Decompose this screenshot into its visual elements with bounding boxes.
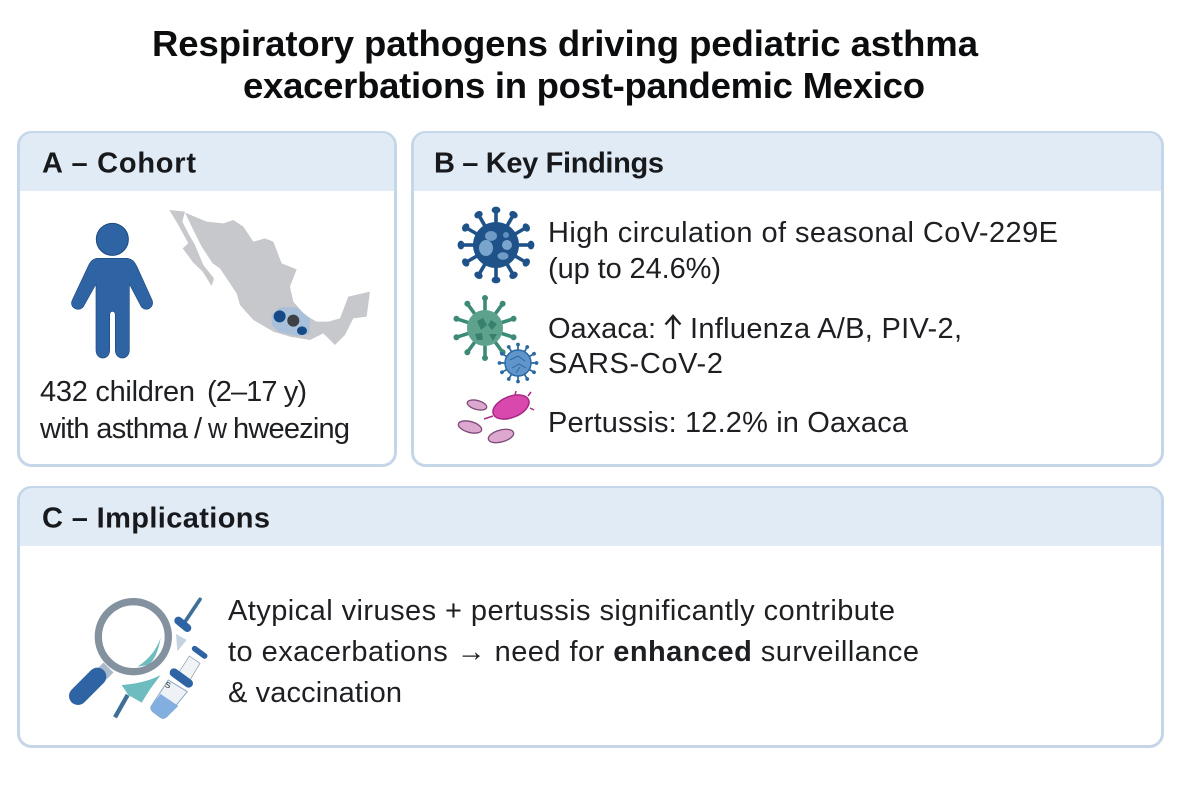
text: implications statement: Atypical viruses + pertussis significantly contribute	[228, 595, 895, 627]
title	[152, 23, 979, 106]
text: cohort description: with asthma	[39, 413, 189, 445]
text: Oaxaca finding: SARS-CoV-2	[548, 348, 723, 380]
icon: magnifying glass, swab and vial: S	[164, 680, 172, 690]
text: implications statement: to exacerbations → need for enhanced surveillance	[228, 636, 919, 668]
map: Mexico with highlighted southern states	[169, 210, 370, 345]
text: implications statement: & vaccination	[228, 677, 402, 709]
title: Respiratory pathogens driving pediatric asthma	[152, 23, 979, 64]
heading: A – Cohort: A – Cohort	[42, 148, 196, 180]
panel: C – Implications	[18, 488, 1162, 746]
icon: child figure	[72, 223, 153, 358]
text: cohort description: w	[207, 413, 228, 445]
text: CoV-229E finding	[548, 217, 1058, 285]
text: cohort description: /	[194, 413, 203, 445]
text: cohort description: 432 children	[40, 376, 195, 408]
icon: pertussis bacteria	[457, 390, 534, 445]
icon: coronavirus	[458, 207, 534, 283]
text: CoV-229E finding: High circulation of seasonal CoV-229E	[548, 217, 1058, 249]
icon: magnifying glass, swab and vial	[78, 599, 205, 719]
text: cohort description: (2–17 y)	[207, 376, 307, 408]
text: implications statement	[228, 595, 919, 709]
text: Oaxaca finding: Influenza A/B, PIV-2,	[690, 313, 962, 345]
icon: green and blue viruses	[453, 295, 538, 383]
heading: B – Key Findings: B – Key Findings	[434, 148, 664, 180]
text: CoV-229E finding: (up to 24.6%)	[548, 253, 721, 285]
text: pertussis finding: Pertussis: 12.2% in Oaxaca	[548, 407, 909, 439]
arrow: up	[666, 316, 680, 339]
text: Oaxaca finding	[548, 313, 962, 380]
text: cohort description: hweezing	[233, 413, 350, 445]
text: cohort description	[39, 376, 350, 445]
title: exacerbations in post-pandemic Mexico	[243, 65, 925, 106]
text: Oaxaca finding: Oaxaca:	[548, 313, 656, 345]
panel: B – Key Findings	[412, 132, 1162, 466]
heading: C – Implications: C – Implications	[42, 502, 270, 534]
panel: A – Cohort	[18, 132, 396, 466]
